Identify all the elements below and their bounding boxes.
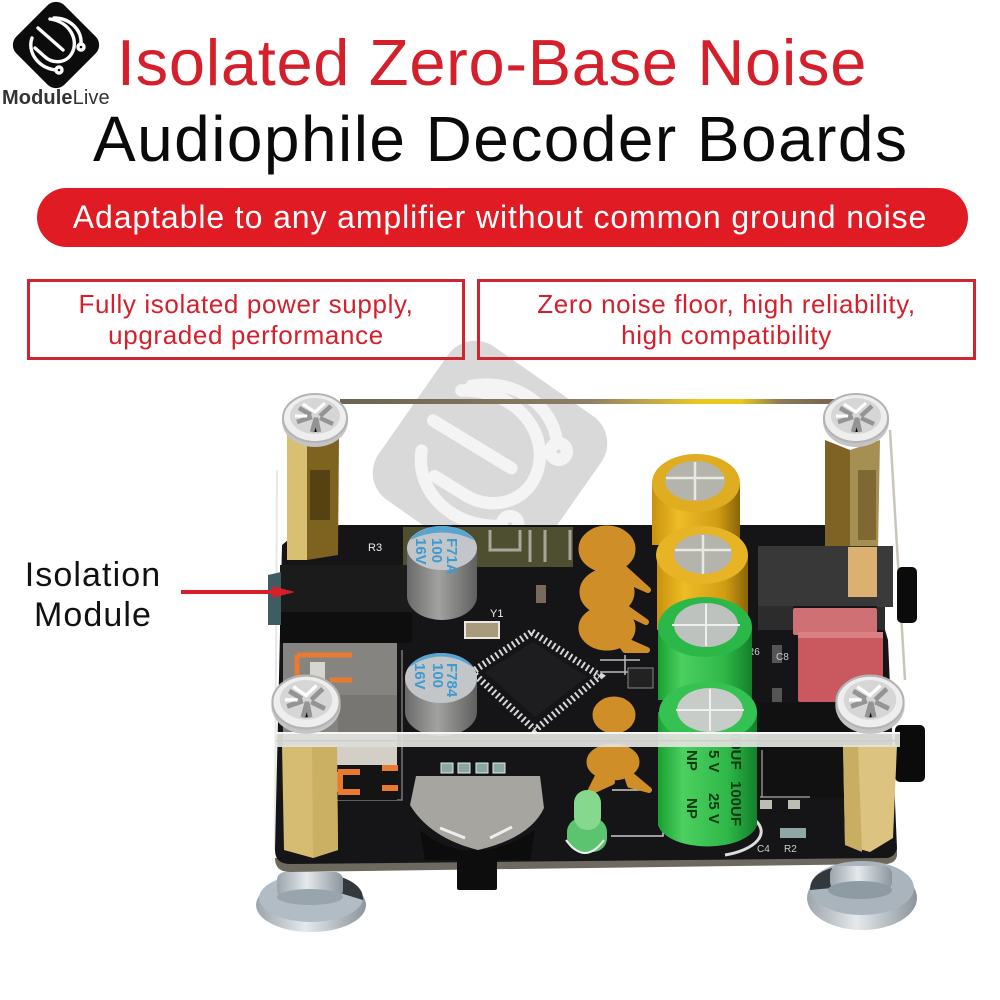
green LED bbox=[566, 790, 607, 853]
circuit board: R3 bbox=[368, 542, 382, 554]
blue capacitors: F784 bbox=[443, 663, 460, 698]
circuit board: Y1 bbox=[490, 608, 503, 620]
circuit board: C4 bbox=[757, 844, 770, 855]
back standoffs bbox=[287, 435, 880, 560]
circuit board: R2 bbox=[784, 844, 797, 855]
metal feet bbox=[256, 861, 917, 932]
screws bbox=[271, 394, 905, 734]
blue capacitors: F71A bbox=[443, 538, 460, 575]
green capacitors: 00UF bbox=[727, 733, 744, 770]
orange ceramic capacitors bbox=[579, 526, 649, 792]
back acrylic plate edge bbox=[275, 399, 905, 850]
banner: Adaptable to any amplifier without common ground noise bbox=[73, 199, 927, 235]
USB port bbox=[283, 643, 398, 800]
isolation module bbox=[268, 565, 412, 643]
callout box right bbox=[477, 279, 976, 360]
blue capacitors: 100 bbox=[428, 538, 445, 563]
isolation module label: Module bbox=[34, 596, 152, 634]
green capacitors: 5 V bbox=[705, 750, 722, 773]
callout box right: high compatibility bbox=[621, 320, 832, 350]
blue capacitors bbox=[405, 526, 477, 736]
title line one: Isolated Zero-Base Noise bbox=[117, 26, 867, 99]
blue capacitors: 100 bbox=[429, 663, 446, 688]
red film capacitors bbox=[793, 608, 883, 702]
green capacitors: NP bbox=[683, 750, 700, 771]
icon: watermark bbox=[337, 305, 643, 611]
coin cell holder bbox=[410, 776, 544, 890]
callout box left bbox=[27, 279, 465, 360]
chip bbox=[472, 632, 600, 730]
logo: ModuleLive bbox=[2, 87, 110, 109]
logo bbox=[2, 2, 110, 109]
title line two: Audiophile Decoder Boards bbox=[93, 103, 908, 175]
circuit board: C8 bbox=[776, 652, 789, 663]
callout box left: Fully isolated power supply, bbox=[78, 289, 414, 319]
green capacitors: 100UF bbox=[727, 781, 744, 826]
arrow bbox=[181, 586, 295, 598]
callout box right: Zero noise floor, high reliability, bbox=[537, 289, 916, 319]
green capacitors bbox=[658, 597, 757, 846]
green capacitors: NP bbox=[683, 798, 700, 819]
banner bbox=[37, 188, 968, 247]
blue capacitors: 16V bbox=[412, 538, 429, 565]
green capacitors: 25 V bbox=[705, 793, 722, 824]
callout box left: upgraded performance bbox=[108, 320, 384, 350]
front standoffs bbox=[282, 745, 897, 858]
circuit board: R6 bbox=[747, 647, 760, 658]
isolation module label bbox=[25, 556, 161, 634]
blue capacitors: 16V bbox=[411, 663, 428, 690]
yellow capacitors bbox=[652, 454, 748, 630]
circuit board bbox=[275, 525, 897, 872]
audio jacks bbox=[758, 546, 925, 809]
icon: logo mark bbox=[8, 0, 104, 93]
isolation module label: Isolation bbox=[25, 556, 161, 594]
front acrylic edge bbox=[276, 732, 900, 747]
